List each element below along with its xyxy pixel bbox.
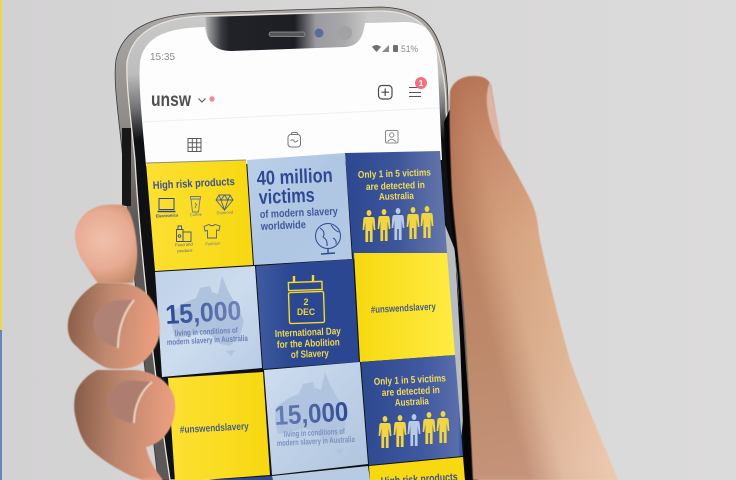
caption: modern slavery in Australia (167, 334, 248, 347)
phone inner frame (127, 11, 472, 480)
camera (314, 26, 352, 40)
hand: ring finger (74, 370, 175, 480)
text (374, 373, 446, 409)
people figures (379, 411, 449, 448)
people figures (363, 206, 433, 242)
text: for the Abolition (277, 337, 340, 351)
text: of Slavery (291, 348, 329, 361)
label: food and produce: Food and (175, 242, 194, 247)
post: only 1 in 5 (first) (345, 151, 447, 259)
label: electronics: Electronics (156, 212, 179, 219)
text: Australia (379, 191, 415, 203)
text (358, 167, 432, 203)
post: hashtag (second): #unswendslavery (180, 421, 249, 436)
label: food and produce (175, 242, 194, 253)
hand: index finger (75, 204, 137, 283)
calendar date: DEC (297, 307, 315, 317)
hand: little finger tip (140, 478, 162, 480)
icon: video tab (288, 132, 300, 147)
notification dot (209, 96, 215, 102)
hand: middle finger (68, 283, 160, 369)
nail (93, 300, 133, 348)
nail edge (118, 300, 134, 348)
headline (256, 165, 333, 209)
icon: laptop (158, 198, 176, 212)
nail (108, 381, 152, 423)
icon: tagged tab (386, 130, 398, 143)
post: hashtag (second) (168, 372, 270, 480)
post: hashtag (first) (354, 253, 455, 362)
caption (167, 326, 248, 347)
badge: 1 (419, 79, 424, 88)
thumb shading (450, 76, 618, 480)
heading: High risk products (153, 176, 235, 192)
label: coffee: Coffee (190, 212, 203, 217)
thumb nail (487, 82, 502, 148)
post: 15,000 (first) (155, 266, 262, 377)
label: diamond: Diamond (216, 210, 234, 215)
phone screen (140, 22, 442, 166)
caption: living in conditions of (175, 326, 238, 338)
number: 15,000 (274, 397, 349, 431)
text: International Day (275, 326, 341, 340)
subtext: worldwide (260, 219, 306, 233)
post: 15,000 (second) (264, 362, 368, 475)
hand: thumb (450, 76, 618, 480)
post: international day (256, 259, 359, 369)
map of Australia (172, 276, 244, 356)
map of Australia (275, 372, 347, 455)
post: only 1 in 5 (second) (361, 355, 463, 465)
app header (140, 22, 442, 166)
post: bottom row (176, 457, 465, 480)
subtext: of modern slavery (260, 206, 339, 221)
icon: calendar (288, 275, 325, 324)
icon: t-shirt (204, 224, 220, 238)
account name: unsw (151, 90, 191, 111)
label: fashion: Fashion (205, 241, 221, 246)
post: high risk products (146, 160, 253, 271)
caption: living in conditions of (284, 427, 345, 439)
status icons: 51% (401, 44, 418, 55)
post grid (146, 151, 465, 480)
phone notch bezel (205, 12, 368, 53)
icon: coffee (190, 196, 200, 212)
phone body (115, 7, 478, 480)
headline: victims (258, 185, 315, 209)
icon: food (176, 226, 191, 242)
post: 40 million victims (247, 153, 352, 265)
status time: 15:35 (150, 51, 175, 63)
icon: grid tab (188, 138, 201, 152)
speaker (269, 32, 305, 36)
icon: add (378, 86, 392, 99)
left edge strip (0, 0, 2, 480)
icon: globe (316, 224, 340, 254)
text: are detected in (366, 180, 425, 193)
text: Only 1 in 5 victims (358, 167, 432, 181)
icon: menu (409, 88, 421, 96)
badge (415, 77, 427, 89)
number: 15,000 (165, 295, 242, 330)
post: hashtag (first): #unswendslavery (371, 302, 437, 316)
text: Australia (395, 396, 429, 409)
caption: modern slavery in Australia (277, 435, 355, 448)
text: are detected in (382, 385, 440, 399)
text: Only 1 in 5 victims (374, 373, 446, 388)
status icons (372, 44, 418, 55)
chevron (198, 98, 206, 102)
label: food and produce: produce (177, 248, 193, 253)
icon: diamond (216, 195, 233, 210)
phone right bezel highlight (445, 225, 463, 450)
phone shadow behind thumb (444, 105, 476, 480)
subtext (260, 206, 339, 233)
calendar date (297, 297, 315, 317)
text (275, 326, 341, 361)
phone side buttons (122, 128, 131, 206)
headline: 40 million (256, 165, 333, 190)
calendar date: 2 (303, 297, 309, 307)
nail edge (134, 382, 152, 423)
caption (277, 427, 355, 448)
